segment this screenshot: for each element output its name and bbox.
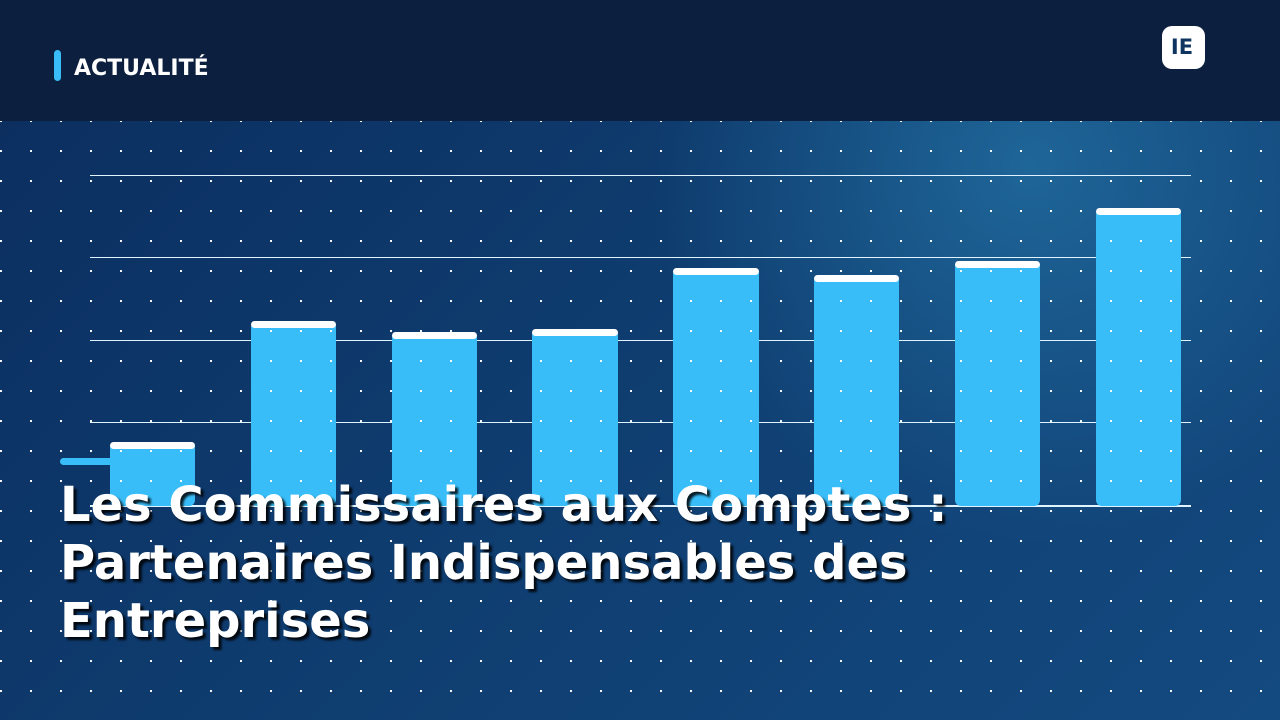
bar 1 (110, 442, 195, 506)
bar 5 (673, 268, 759, 506)
title (60, 477, 947, 652)
bar 6 (814, 275, 899, 506)
title: Les Commissaires aux Comptes : (60, 477, 947, 533)
logo badge: IE (1171, 35, 1193, 59)
bar 7 (955, 261, 1040, 506)
header band (0, 0, 1280, 121)
logo badge (1162, 26, 1205, 69)
bar 8 (1096, 208, 1181, 506)
title: Entreprises (60, 593, 370, 649)
bar 3 (392, 332, 477, 506)
title: Partenaires Indispensables des (60, 535, 908, 591)
section label: ACTUALITÉ (74, 56, 209, 81)
bar 2 (251, 321, 336, 506)
bar 4 (532, 329, 618, 506)
header accent mark (54, 50, 61, 81)
title accent line (60, 458, 120, 465)
